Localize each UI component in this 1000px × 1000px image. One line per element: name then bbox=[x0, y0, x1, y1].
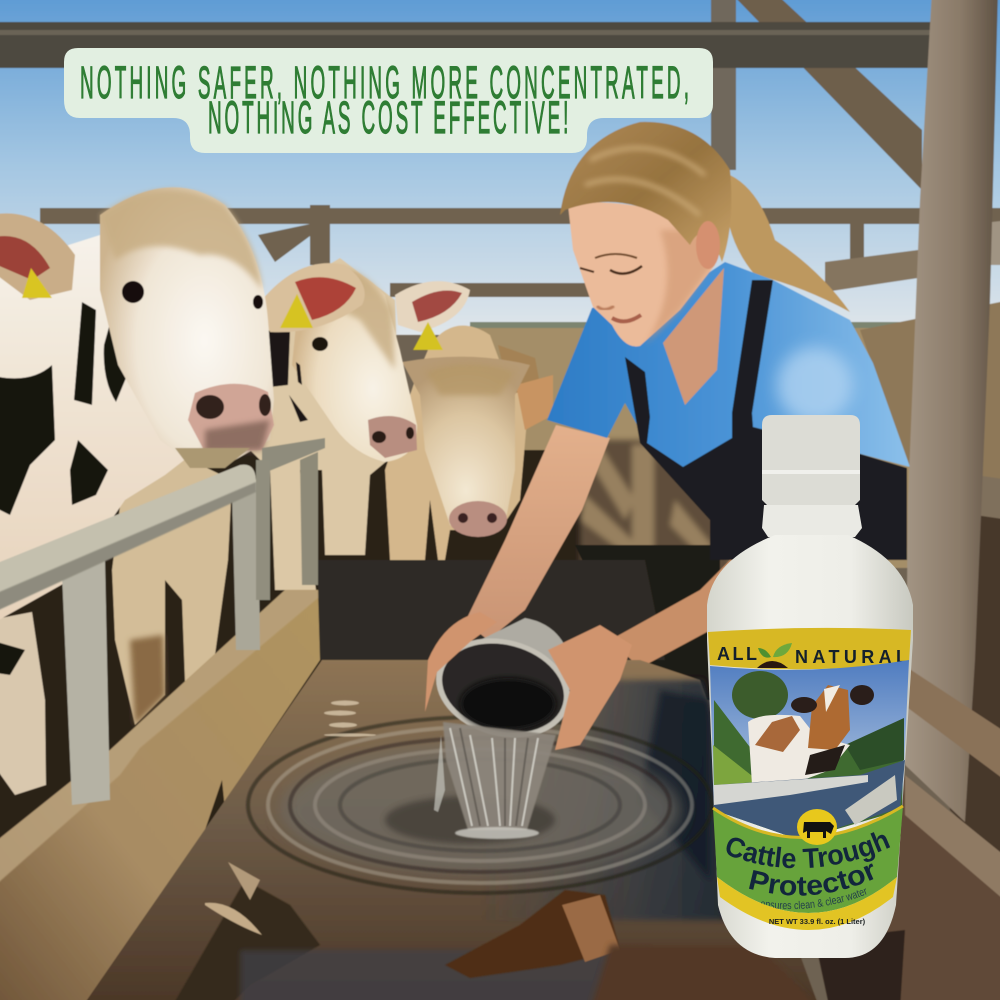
water stream bbox=[434, 722, 556, 839]
label cow bbox=[748, 715, 850, 785]
facial features bbox=[580, 254, 642, 321]
neck bbox=[663, 268, 724, 405]
product bottle bbox=[707, 415, 913, 958]
trough back wall bbox=[318, 560, 665, 660]
ear tag: cow 1 right bbox=[280, 294, 313, 328]
label: yellow bottom band: NET WT 33.9 fl. oz. (1 Liter) bbox=[769, 917, 866, 926]
hair bbox=[560, 122, 731, 262]
water highlights bbox=[324, 700, 376, 736]
headline text: NOTHING SAFER, NOTHING MORE CONCENTRATED, bbox=[80, 59, 689, 108]
label: green panel: Cattle Trough bbox=[726, 832, 890, 868]
far right rails bbox=[825, 220, 1000, 520]
woman bbox=[465, 122, 910, 668]
left trough bbox=[0, 590, 320, 1000]
apron bbox=[625, 280, 907, 560]
blue shirt bbox=[547, 262, 910, 467]
cow 3 bbox=[385, 326, 553, 560]
callout background bbox=[64, 48, 713, 153]
label: yellow top band: NATURAL bbox=[795, 647, 907, 667]
label: yellow bottom band bbox=[717, 877, 897, 930]
right trough wall bbox=[815, 775, 1000, 1000]
ear tag: cow 1 left bbox=[22, 268, 52, 298]
bottle cap bbox=[762, 415, 862, 537]
face bbox=[568, 202, 715, 347]
right rail bbox=[908, 668, 1000, 784]
big post bbox=[905, 0, 998, 822]
background: sky bbox=[0, 0, 1000, 335]
label: green panel: ensures clean & clear water bbox=[761, 888, 866, 910]
headline text bbox=[80, 59, 689, 143]
label: yellow top band: ALL bbox=[717, 644, 757, 664]
label: green panel: Protector bbox=[749, 864, 874, 896]
ponytail bbox=[725, 175, 850, 312]
cow 1 bbox=[0, 187, 365, 795]
bottle body bbox=[707, 535, 913, 958]
far arm bbox=[610, 457, 785, 668]
label: green panel bbox=[712, 804, 904, 913]
overhead beams bbox=[0, 0, 935, 190]
near arm bbox=[465, 425, 610, 640]
water reflections bbox=[170, 880, 320, 1000]
background: far field and ground bbox=[0, 300, 1000, 870]
cow 2 bbox=[250, 258, 470, 590]
ear tag: cow 2 bbox=[413, 322, 443, 350]
water in trough bbox=[80, 660, 820, 1000]
back fence bbox=[40, 205, 1000, 297]
label: cow photo bbox=[710, 660, 909, 840]
hands bbox=[425, 612, 632, 750]
label: yellow top band bbox=[708, 628, 911, 669]
bucket bbox=[425, 618, 581, 752]
left fence bbox=[0, 438, 325, 805]
headline callout bbox=[64, 48, 713, 153]
headline text: NOTHING AS COST EFFECTIVE! bbox=[208, 94, 568, 143]
label: cattle badge bbox=[797, 809, 837, 845]
